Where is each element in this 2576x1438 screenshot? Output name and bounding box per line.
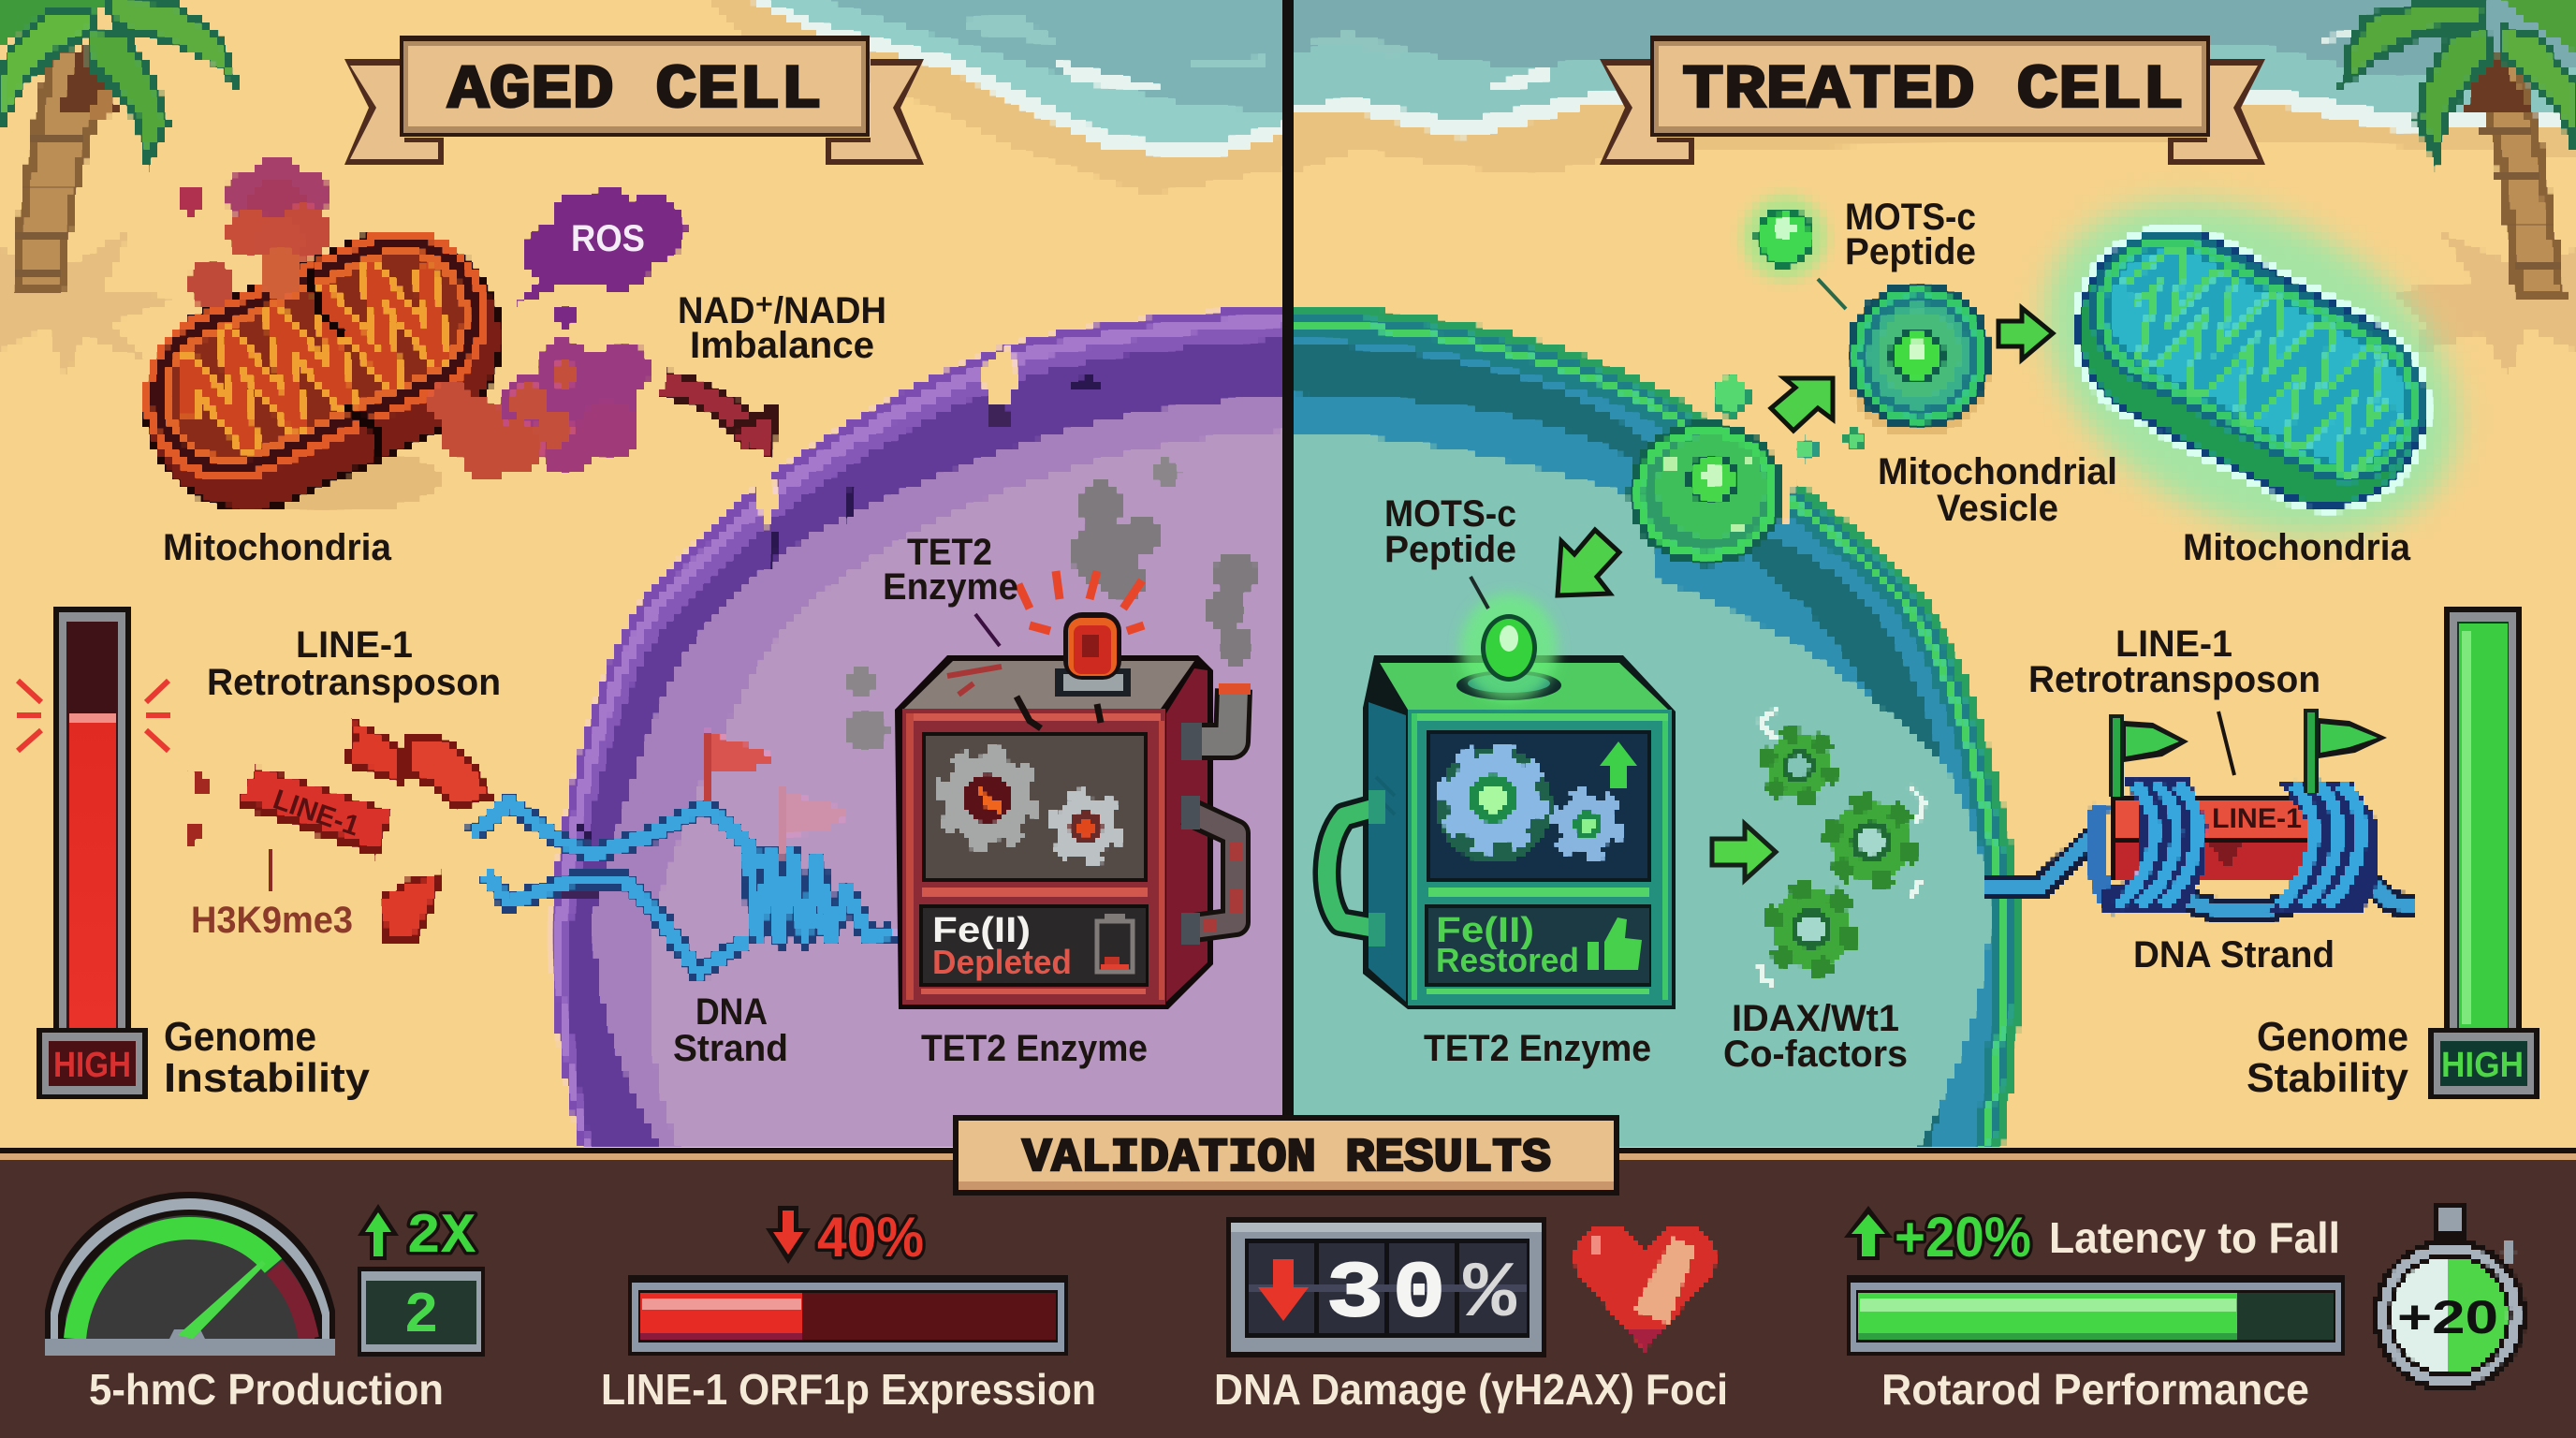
label: spool LINE-1: LINE-1 — [2212, 803, 2302, 834]
label: aged DNA strand: Strand — [673, 1028, 788, 1069]
icon: IDAX/Wt1 co-factor gears — [1760, 710, 1925, 985]
right sea and beach — [1288, 0, 2576, 176]
metric value: 30 percent — [1326, 1251, 1517, 1340]
title: validation results: VALIDATION RESULTS — [1022, 1132, 1551, 1185]
label: MOTS-c peptide inside — [1384, 493, 1516, 570]
metric sublabel: latency to fall: Latency to Fall — [2049, 1213, 2340, 1262]
icon: green hose handle — [1326, 790, 1385, 946]
label: treated LINE-1 retrotransposon: Retrotransposon — [2028, 659, 2320, 700]
icon: broken gears — [944, 756, 1116, 858]
icon: 40% down arrow — [766, 1206, 811, 1264]
left sea and beach — [706, 0, 1288, 195]
metric label: LINE-1 ORF1p expression: LINE-1 ORF1p Expression — [601, 1365, 1096, 1414]
metric value: 30 percent: % — [1463, 1251, 1517, 1340]
icon: alarm beacon — [1018, 571, 1144, 697]
counter: 5-hmC value — [358, 1267, 485, 1357]
icon: 2X up arrow — [358, 1204, 399, 1260]
label: MOTS-c peptide inside: MOTS-c — [1384, 493, 1516, 535]
label: TET2 enzyme callout: TET2 — [907, 532, 992, 573]
status: Fe(II) depleted: Depleted — [932, 943, 1072, 981]
icon: stopwatch — [2373, 1204, 2526, 1392]
label: HIGH red: HIGH — [53, 1046, 131, 1085]
label: aged LINE-1 retrotransposon: LINE-1 — [296, 624, 413, 666]
icon: shattered LINE-1 fragments — [183, 715, 494, 946]
icon: +20% up arrow — [1844, 1206, 1893, 1260]
label: MOTS-c peptide outside: MOTS-c — [1845, 197, 1976, 238]
label: NAD imbalance: NAD⁺/NADH — [678, 290, 886, 331]
panel: treated cell membrane — [1288, 309, 2018, 1157]
label: aged LINE-1 retrotransposon — [207, 624, 501, 703]
gauge: genome stability — [2428, 607, 2539, 1099]
divider — [1282, 0, 1294, 1150]
icon: up arrow on screen — [1600, 741, 1637, 788]
ROS speech cloud — [518, 187, 686, 328]
label: HIGH green: HIGH — [2441, 1046, 2524, 1085]
panel: validation results bar — [0, 1115, 2576, 1438]
metric value: +20 percent: +20% — [1895, 1206, 2031, 1269]
icon: aged mitochondria — [109, 195, 537, 547]
arrow: enzyme to co-factors — [1712, 824, 1776, 880]
icon: released vesicle at membrane — [1628, 420, 1785, 566]
icon: green status light — [1456, 594, 1561, 702]
icon: restored TET2 enzyme box — [1326, 594, 1676, 1009]
left palm tree — [0, 0, 243, 296]
label: fragment LINE-1: LINE-1 — [270, 784, 363, 843]
metric label: 5-hmC production: 5-hmC Production — [89, 1365, 444, 1414]
metric value: counter 2: 2 — [403, 1283, 439, 1349]
label: mitochondrial vesicle: Mitochondrial — [1878, 451, 2117, 492]
gauge: genome instability — [17, 607, 170, 1099]
label: NAD imbalance — [678, 290, 886, 366]
callout leader lines — [271, 279, 2234, 891]
label: MOTS-c peptide outside: Peptide — [1845, 231, 1976, 272]
title: treated cell: TREATED CELL — [1682, 55, 2184, 125]
flag: fading mark — [780, 789, 850, 858]
label: IDAX/Wt1 co-factors: IDAX/Wt1 — [1732, 998, 1899, 1039]
label: IDAX/Wt1 co-factors — [1723, 998, 1908, 1075]
flag: green left — [2109, 714, 2188, 797]
label: genome instability — [164, 1014, 371, 1101]
stopwatch value: +20 — [2397, 1291, 2498, 1343]
label: genome instability: Genome — [164, 1014, 316, 1060]
panel: aged cell membrane — [541, 305, 1307, 1189]
label: genome stability: Stability — [2247, 1055, 2409, 1101]
title: aged cell: AGED CELL — [447, 55, 822, 125]
label: TET2 enzyme callout — [883, 532, 1018, 608]
smoke: upper plume — [179, 156, 331, 309]
left palm shadow — [0, 229, 184, 378]
bar: LINE-1 ORF1p expression — [628, 1275, 1068, 1356]
label: TET2 enzyme callout: Enzyme — [883, 566, 1018, 608]
label: IDAX/Wt1 co-factors: Co-factors — [1723, 1034, 1908, 1075]
icon: mitochondrial vesicle — [1846, 281, 1992, 437]
label: treated TET2 enzyme: TET2 Enzyme — [1424, 1028, 1651, 1069]
icon: steam pipes and hose — [1181, 683, 1251, 945]
banner: aged cell — [344, 36, 924, 165]
metric value: 30 percent: 0 — [1393, 1251, 1445, 1340]
metric value: 40 percent: 40% — [817, 1206, 924, 1269]
label: H3K9me3: H3K9me3 — [191, 900, 353, 941]
banner: treated cell — [1600, 36, 2265, 165]
label: aged DNA strand — [673, 991, 788, 1069]
smoke: aged enzyme — [843, 459, 1258, 753]
icon: MOTS-c peptide glow ball — [1742, 195, 1828, 281]
label: treated DNA strand: DNA Strand — [2133, 934, 2334, 976]
icon: bandaged heart — [1574, 1225, 1716, 1351]
label: treated mitochondria: Mitochondria — [2183, 527, 2411, 568]
label: genome instability: Instability — [164, 1055, 371, 1101]
label: MOTS-c peptide outside — [1845, 197, 1976, 272]
icon: depleted TET2 enzyme box — [895, 571, 1251, 1009]
gauge: 5-hmC dial — [45, 1192, 335, 1356]
label: treated LINE-1 retrotransposon — [2028, 624, 2320, 700]
arrow: vesicle to droplet, up right — [1771, 378, 1833, 431]
status: Fe(II) restored — [1436, 911, 1579, 979]
right palm shadow — [2393, 229, 2576, 378]
smoke: lower cloud — [429, 339, 651, 481]
metric value: 30 percent: 3 — [1326, 1251, 1383, 1340]
arrow: peptide down-left to enzyme — [1558, 530, 1619, 595]
icon: empty battery — [1097, 914, 1133, 972]
status: Fe(II) restored: Fe(II) — [1436, 911, 1534, 950]
DNA strand: aged, unravelled — [472, 802, 895, 973]
flag: red methyl mark — [704, 730, 776, 803]
label: aged DNA strand: DNA — [695, 991, 768, 1033]
metric value: 2X: 2X — [406, 1206, 476, 1269]
bar: rotarod performance — [1847, 1275, 2345, 1356]
status: Fe(II) depleted — [932, 911, 1072, 981]
icon: intact LINE-1 DNA coil — [1984, 779, 2415, 915]
label: genome stability: Genome — [2257, 1014, 2408, 1060]
icon: vesicle droplets — [1713, 376, 1866, 462]
label: aged mitochondria: Mitochondria — [163, 527, 392, 568]
right palm tree — [2338, 0, 2576, 298]
membrane gaps — [981, 345, 1017, 404]
label: aged LINE-1 retrotransposon: Retrotransposon — [207, 662, 501, 703]
flag: green right — [2304, 709, 2387, 793]
label: treated LINE-1 retrotransposon: LINE-1 — [2115, 624, 2232, 665]
label: mitochondrial vesicle: Vesicle — [1937, 488, 2058, 529]
arrow: NAD imbalance into cell — [663, 384, 777, 461]
counter: DNA damage -30% — [1226, 1217, 1546, 1357]
label: ROS: ROS — [571, 218, 645, 259]
label: NAD imbalance: Imbalance — [690, 325, 874, 366]
status: Fe(II) depleted: Fe(II) — [932, 911, 1031, 950]
metric label: DNA damage foci: DNA Damage (γH2AX) Foci — [1214, 1365, 1728, 1414]
icon: restored gears — [1436, 747, 1616, 863]
label: genome stability — [2247, 1014, 2409, 1101]
metric label: rotarod performance: Rotarod Performance — [1881, 1365, 2309, 1414]
arrow: vesicle to mitochondria — [1998, 308, 2053, 360]
status: Fe(II) restored: Restored — [1436, 941, 1579, 979]
icon: healthy mitochondria — [1986, 133, 2516, 605]
icon: thumbs up — [1588, 917, 1642, 970]
label: aged TET2 enzyme: TET2 Enzyme — [921, 1028, 1148, 1069]
label: MOTS-c peptide inside: Peptide — [1384, 529, 1516, 570]
label: mitochondrial vesicle — [1878, 451, 2117, 529]
